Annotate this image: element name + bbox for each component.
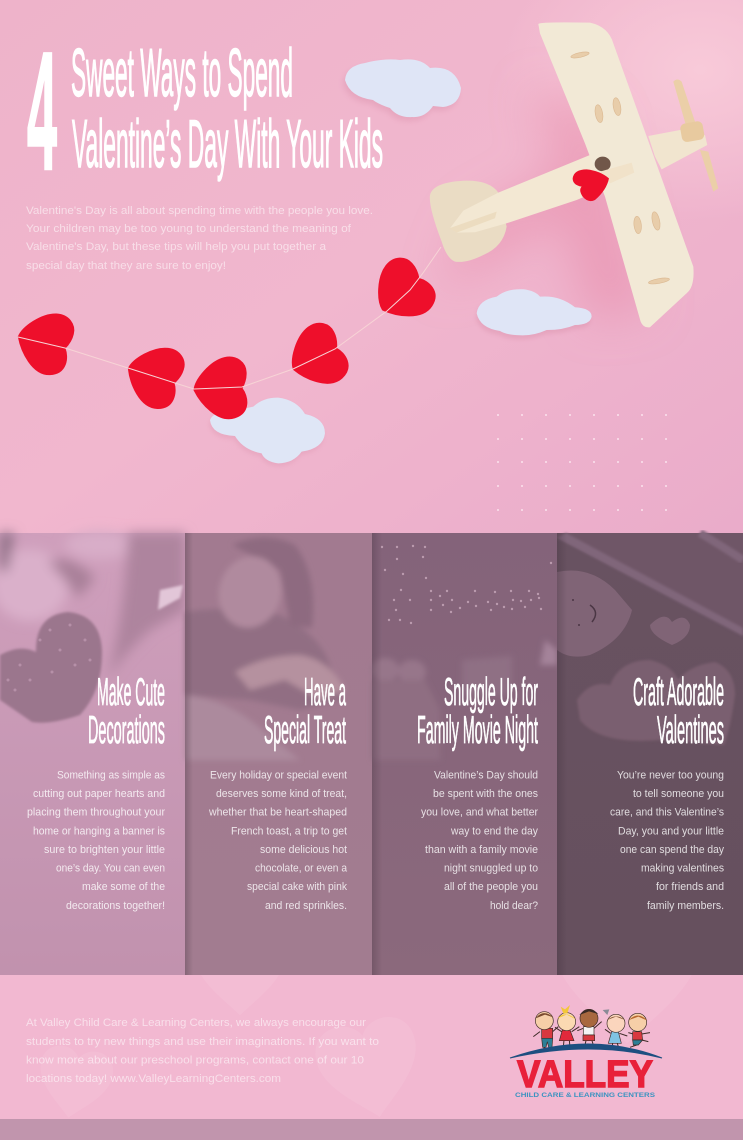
body text: sure to brighten your little <box>44 844 165 856</box>
body text: than with a family movie <box>425 844 538 856</box>
panel: snuggle up for family movie night <box>371 533 557 975</box>
body text: chocolate, or even a <box>255 863 347 875</box>
body text: family members. <box>647 900 724 912</box>
footer text: locations today! www.ValleyLearningCenters.com <box>26 1073 281 1085</box>
panel: have a special treat: Have a <box>304 671 346 714</box>
hero background <box>0 0 743 533</box>
heading <box>88 671 165 752</box>
body text: to tell someone you <box>633 788 724 800</box>
panel: craft adorable valentines <box>557 533 743 975</box>
intro paragraph: Valentine's Day, but these tips will help you put together a <box>26 241 327 253</box>
body text: home or hanging a banner is <box>33 825 165 837</box>
footer text: At Valley Child Care & Learning Centers, we always encourage our <box>26 1017 366 1029</box>
body text: care, and this Valentine’s <box>610 807 724 819</box>
body text: all of the people you <box>444 881 538 893</box>
text: Snuggle Up for <box>444 671 538 714</box>
body text <box>27 770 165 912</box>
body text: placing them throughout your <box>27 807 165 819</box>
body text: You’re never too young <box>617 770 724 782</box>
clothespin and heart <box>573 157 634 201</box>
body text: hold dear? <box>490 900 538 912</box>
heading <box>633 671 724 752</box>
panel: have a special treat <box>185 533 372 975</box>
icon: cloud top <box>343 59 461 121</box>
body text: cutting out paper hearts and <box>33 788 165 800</box>
title <box>27 17 383 205</box>
fuselage <box>450 155 634 233</box>
icon: cloud right <box>476 289 592 339</box>
body text <box>421 770 539 912</box>
intro paragraph: special day that they are sure to enjoy! <box>26 260 226 272</box>
body text: Day, you and your little <box>618 825 724 837</box>
body text: way to end the day <box>450 825 539 837</box>
body text: Something as simple as <box>57 770 165 782</box>
photo: child hugging <box>185 538 345 760</box>
text: Family Movie Night <box>417 709 538 752</box>
intro paragraph: Your children may be too young to understand the meaning of <box>26 223 352 235</box>
text: Decorations <box>88 709 165 752</box>
heading <box>264 671 346 752</box>
wordmark: VALLEY <box>517 1054 653 1096</box>
photo: glitter heart <box>0 531 185 723</box>
body text <box>208 770 348 912</box>
body text: making valentines <box>641 863 724 875</box>
body text: Valentine’s Day should <box>434 770 538 782</box>
intro paragraph <box>26 205 373 272</box>
text: Sweet Ways to Spend <box>71 35 293 111</box>
icon: wooden toy plane <box>430 22 718 327</box>
intro paragraph: Valentine's Day is all about spending time with the people you love. <box>26 205 373 217</box>
footer text: know more about our preschool programs, contact one of our 10 <box>26 1054 364 1066</box>
body text: be spent with the ones <box>433 788 538 800</box>
propeller <box>673 79 718 192</box>
footer panel <box>0 903 743 1127</box>
text: Make Cute <box>97 671 165 714</box>
photo: string lights <box>371 545 557 760</box>
body text: night snuggled up to <box>444 863 538 875</box>
body text: for friends and <box>656 881 724 893</box>
tail fin <box>430 181 507 262</box>
nose <box>648 129 707 169</box>
title: 4 <box>27 17 57 205</box>
panel: make cute decorations <box>0 531 185 975</box>
body text <box>610 770 725 912</box>
footer text: students to try new things and use their imaginations. If you want to <box>26 1036 379 1048</box>
body text: special cake with pink <box>247 881 348 893</box>
icon: cloud bottom <box>209 398 325 467</box>
wing slots <box>570 51 670 285</box>
body text: whether that be heart-shaped <box>208 807 347 819</box>
photo: paper hearts <box>557 533 743 745</box>
body text: some delicious hot <box>260 844 347 856</box>
footer text <box>26 1017 379 1085</box>
body text: French toast, a trip to get <box>231 825 347 837</box>
logo: valley child care <box>510 1005 662 1099</box>
body text: deserves some kind of treat, <box>216 788 347 800</box>
heading <box>417 671 538 752</box>
body text: one can spend the day <box>620 844 725 856</box>
tagline: CHILD CARE & LEARNING CENTERS <box>515 1092 655 1099</box>
body text: make some of the <box>82 881 165 893</box>
hill arc <box>510 1044 662 1058</box>
body text: one’s day. You can even <box>56 863 165 875</box>
bottom bar <box>0 1119 743 1140</box>
body text: you love, and what better <box>421 807 538 819</box>
text: Special Treat <box>264 709 346 752</box>
body text: decorations together! <box>66 900 165 912</box>
decorative dot grid <box>497 414 667 511</box>
wing <box>538 22 694 327</box>
icon: plane shadow <box>440 90 650 320</box>
string of hearts <box>18 247 446 427</box>
body text: Every holiday or special event <box>210 770 347 782</box>
body text: and red sprinkles. <box>265 900 347 912</box>
kids illustration <box>533 1005 650 1049</box>
